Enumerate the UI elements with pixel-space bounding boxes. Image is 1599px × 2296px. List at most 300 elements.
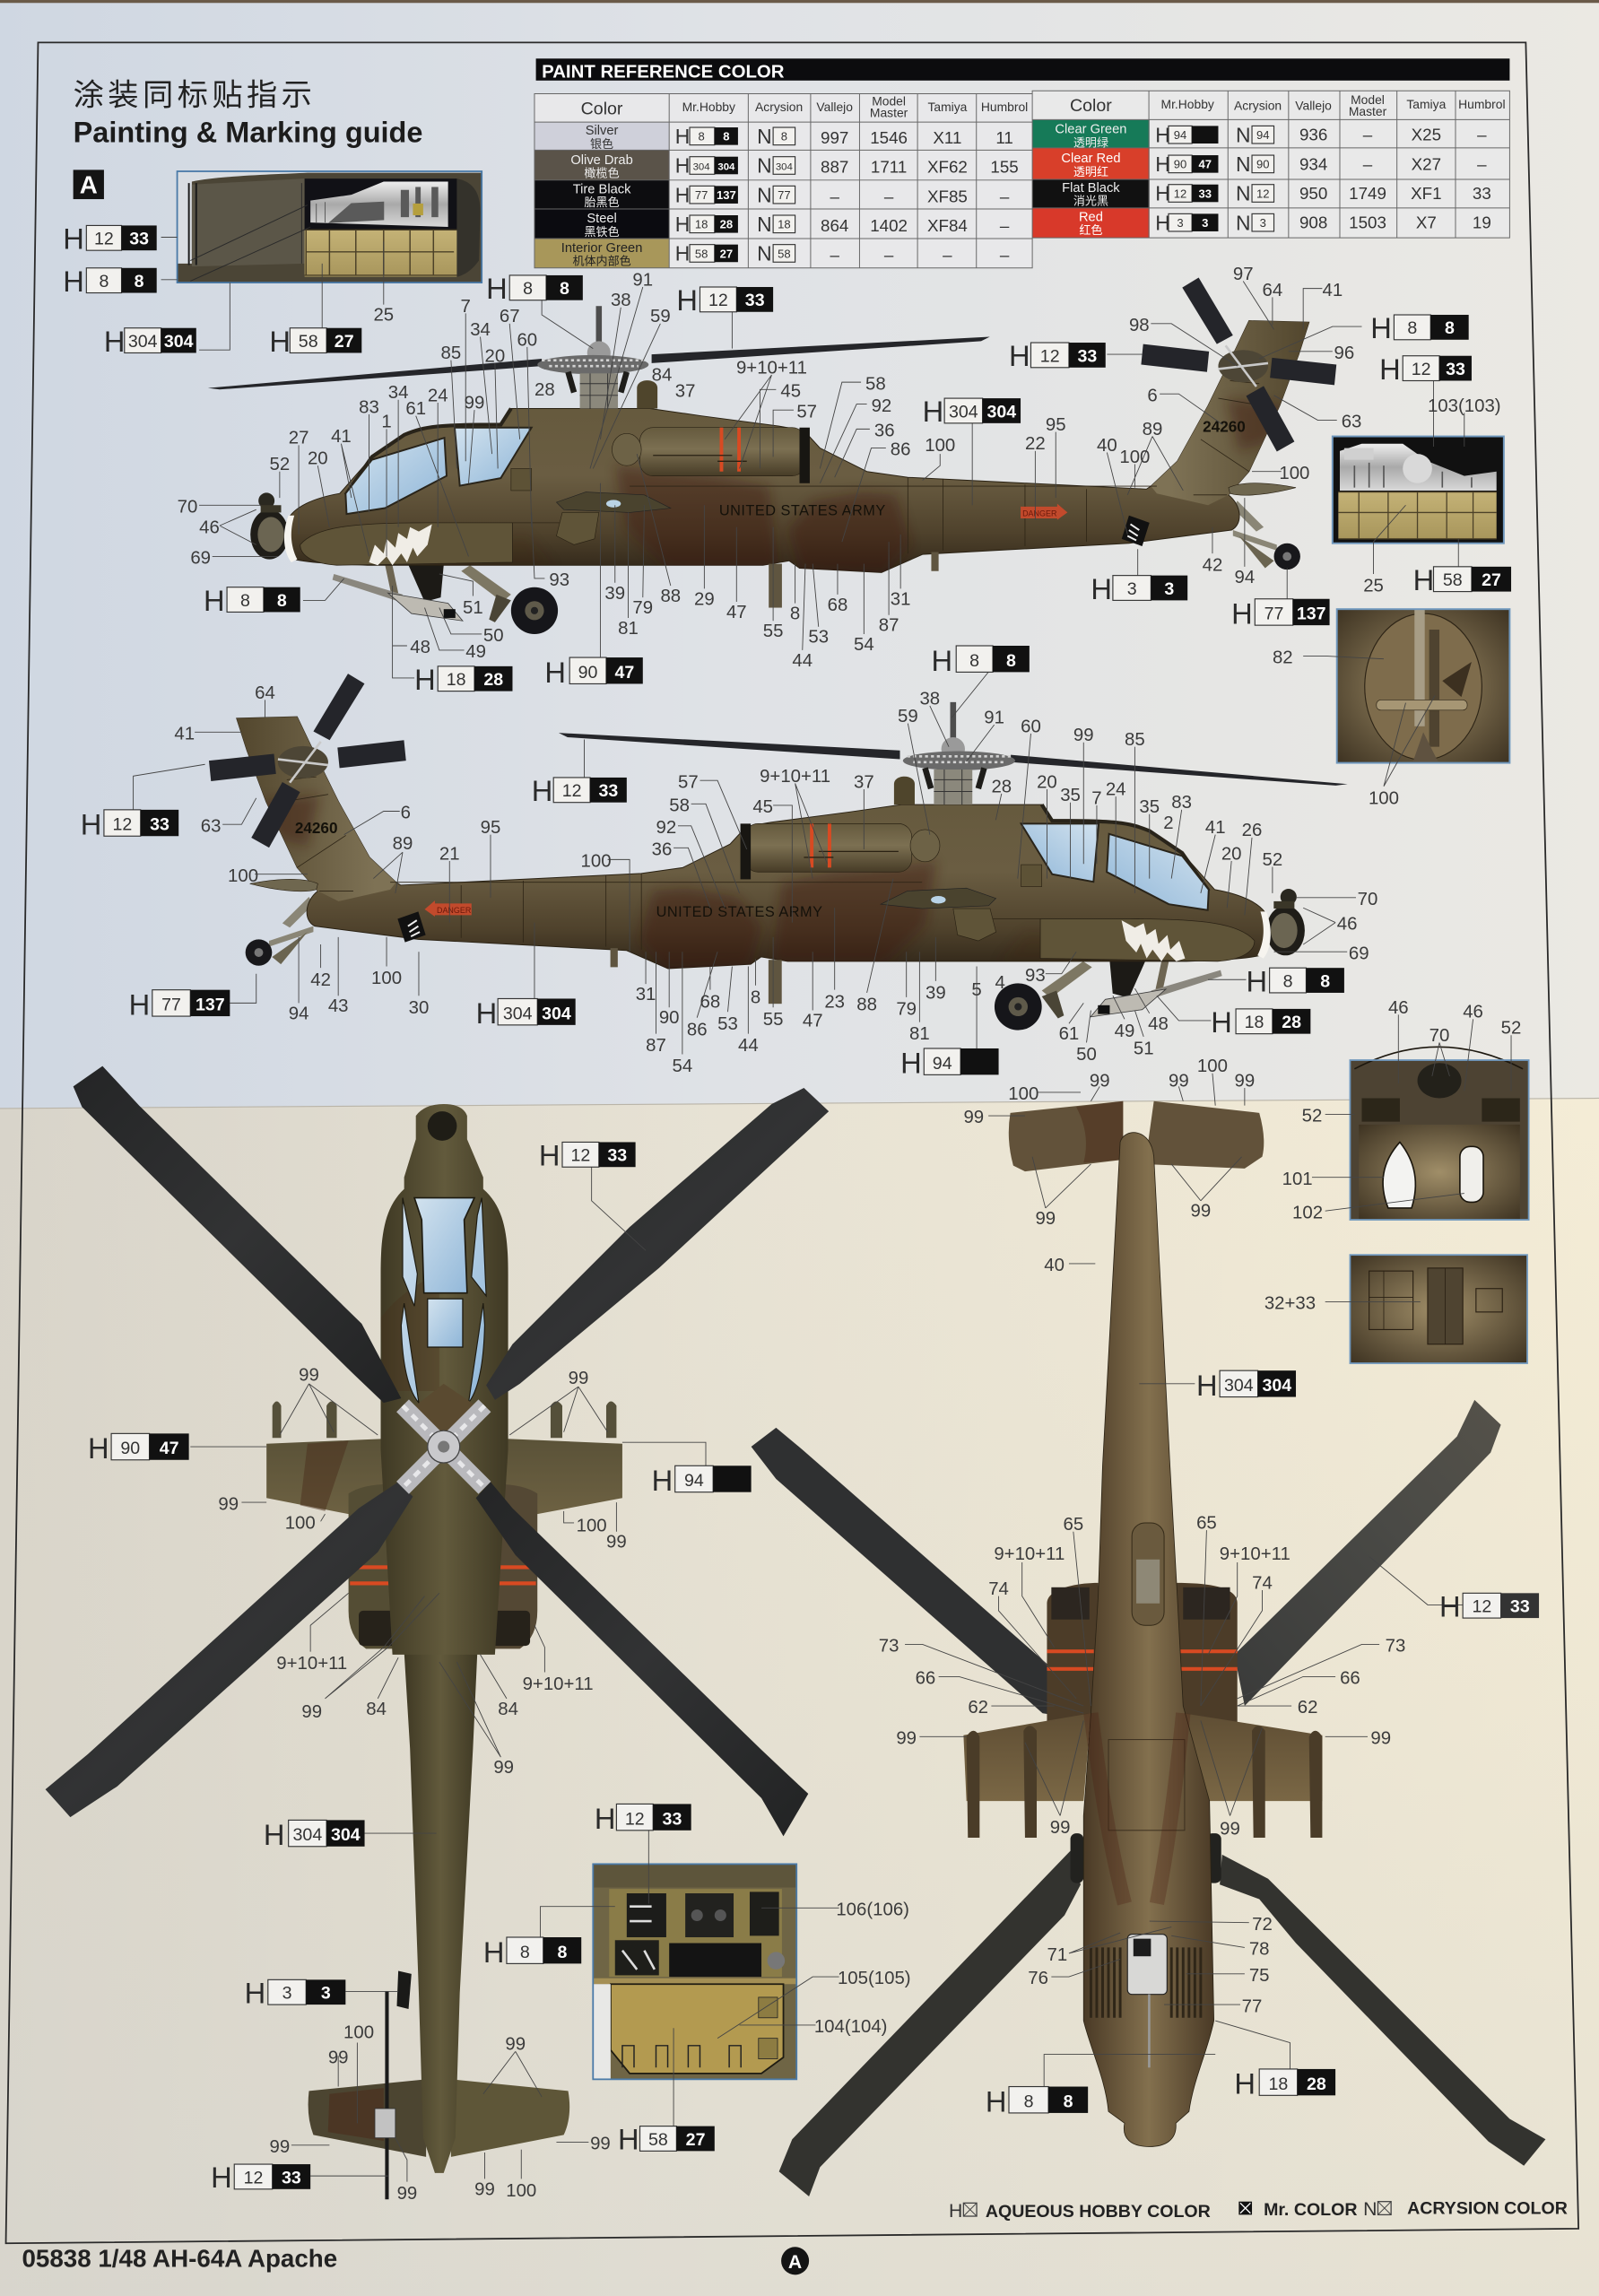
paint chip H 12/33: H [211,2161,232,2194]
paint chip H 8/8: 8 [240,591,250,611]
callouts: upper side view: 54 [854,635,874,655]
paint reference table: 18 [695,218,708,231]
paint chip H 18/28: 18 [447,670,466,690]
callouts: bottom view: 100 [1008,1084,1038,1104]
callouts: bottom view: 75 [1249,1966,1270,1986]
title: Painting & Marking guide [74,116,422,148]
paint chip H 12/33 [539,1139,636,1172]
callouts: upper side view: 57 [796,402,817,422]
callouts: lower side view: 63 [201,816,221,836]
paint reference table: 58 [778,247,791,260]
callouts: upper side view: 79 [632,598,653,618]
paint reference table: 8 [781,130,787,144]
paint reference table: Tamiya [1406,97,1447,111]
paint reference table: 消光黑 [1073,195,1108,208]
paint chip H 12/33: 12 [1040,346,1060,366]
callouts: upper side view: 20 [485,346,505,366]
callouts: bottom view: 74 [1252,1573,1273,1593]
paint reference table: Vallejo [816,100,853,114]
callouts: lower side view: 31 [636,985,656,1004]
paint chip H 58/27: 58 [299,332,318,352]
callouts: lower side view: 37 [854,772,874,792]
paint chip H 304/304: H [1196,1369,1218,1402]
callouts: top view: 100 [506,2181,536,2201]
rotor head [537,306,648,409]
callouts: lower side view: 69 [1349,944,1369,963]
callouts: upper side view: 103(103) [1428,396,1501,416]
paint reference table: Acrysion [755,100,803,114]
paint reference table: – [1000,216,1010,235]
callouts: lower side view: 42 [310,970,331,990]
paint reference table: N [1236,152,1251,176]
callouts: bottom view: 66 [1340,1669,1360,1689]
callouts: upper side view: 100 [1369,788,1399,808]
callouts: bottom view: 99 [963,1108,984,1127]
callouts: bottom view: 99 [896,1728,917,1748]
callouts: bottom view: 32+33 [1264,1294,1316,1314]
paint reference table: 透明绿 [1073,135,1108,149]
fuselage lettering, view 1: DANGER [1022,509,1057,518]
callouts: lower side view: 64 [255,683,275,703]
callouts: upper side view: 25 [1363,577,1384,596]
paint chip H 94 clear green [900,1047,999,1080]
callouts: bottom view: 73 [879,1637,899,1657]
forward fuselage and cockpit [381,1104,508,1655]
paint chip H 77/137: 137 [1297,604,1326,624]
main rotor blades [208,337,990,389]
callouts: lower side view: 35 [1139,797,1160,817]
paint reference table: N [1236,211,1251,234]
callouts: upper side view: 67 [500,307,520,326]
paint chip H 18/28: H [1211,1005,1232,1039]
paint reference table: 77 [695,188,708,202]
paint chip H 8/8: H [486,272,508,305]
callouts: top view: 99 [569,1369,588,1388]
callouts: lower side view: 85 [1125,730,1145,750]
paint reference table: 908 [1299,213,1327,232]
paint reference table: Humbrol [981,100,1028,114]
paint chip H 3/3: 3 [1127,579,1137,599]
callouts: top view: 99 [590,2135,611,2154]
colour brand legend: N [1363,2199,1377,2220]
callouts: upper side view: 98 [1129,316,1150,335]
callouts: upper side view: 82 [1273,648,1293,668]
callouts: cockpit interior: 106(106) [836,1900,909,1920]
callouts: lower side view: 92 [656,818,676,838]
callouts: bottom view: 65 [1196,1513,1217,1533]
paint reference table: X25 [1412,126,1441,144]
callouts: bottom view: 62 [968,1698,988,1718]
paint reference table: 950 [1299,184,1327,203]
paint reference table: 3 [1260,216,1266,230]
paint chip H 8/8: 8 [1024,2092,1034,2111]
fuselage lettering, view 2: 24260 [295,819,337,837]
callouts: lower side view: 26 [1242,821,1262,840]
callouts: lower side view: 46 [1337,915,1358,935]
callouts: lower side view: 20 [1221,844,1242,864]
callouts: upper side view: 84 [652,365,672,385]
paint chip H 12/33: H [539,1139,560,1172]
paint reference table: 94 [1256,128,1270,142]
paint reference table: – [1000,187,1010,205]
paint reference table: 橄榄色 [584,167,620,180]
callouts: bottom view: 99 [1235,1071,1255,1091]
paint reference table: 27 [720,247,733,260]
callouts: lower side view: 8 [751,987,760,1007]
paint reference table: N [757,154,772,178]
colour brand legend: AQUEOUS HOBBY COLOR [986,2202,1211,2222]
paint chip H 304/304: H [923,395,943,428]
callouts: upper side view: 63 [1342,413,1361,432]
fuselage lettering, view 1: 24260 [1203,418,1246,436]
callouts: lower side view: 60 [1021,717,1041,736]
paint reference table: 1503 [1349,213,1386,232]
paint reference table: 胎黑色 [584,196,620,209]
paint chip H 18/28 [1234,2067,1335,2100]
paint reference table [534,58,1509,268]
paint reference table: Acrysion [1234,98,1282,112]
paint reference table: 77 [778,188,791,202]
paint reference table: N [757,183,772,206]
paint reference table: XF1 [1411,184,1442,203]
inset: cockpit interior [593,1864,796,2079]
callouts: upper side view: 38 [611,291,631,310]
paint reference table: – [884,187,894,205]
paint chip H 3/3: 3 [1164,579,1174,599]
callouts: upper side view: 91 [632,270,653,290]
callouts: lower side view: 90 [659,1008,680,1028]
paint chip H 8/8 [483,1935,581,1969]
callouts: lower side view: 55 [763,1010,783,1030]
paint chip H 3/3 [1091,572,1187,605]
callouts: lower side view: 50 [1076,1045,1097,1065]
paint chip H 304/304 [1196,1369,1296,1402]
callouts: upper side view: 93 [549,570,569,590]
paint chip H 304/304: 304 [293,1825,322,1845]
paint chip H 12/33: 33 [745,291,765,310]
callouts: upper side view: 51 [463,598,483,618]
paint reference table: – [1363,154,1373,173]
paint reference table: N [1236,182,1251,205]
paint chip H 12/33 [1009,339,1106,372]
paint chip H 8/8: H [986,2084,1006,2118]
callouts: upper side view: 50 [483,626,504,646]
callouts: upper side view: 37 [675,381,695,401]
paint chip H 90/47: 90 [578,663,598,683]
callouts: upper side view: 88 [660,587,681,606]
paint reference table: 透明红 [1073,165,1108,178]
callouts: upper side view: 59 [650,307,671,326]
callouts: top view: 100 [285,1513,316,1533]
paint reference table: – [830,246,839,265]
paint reference table: – [1363,126,1373,144]
paint chip H 58/27: H [618,2123,639,2156]
paint reference table: 11 [995,128,1013,147]
paint chip H 12/33: 12 [571,1146,590,1166]
callouts: top view: 99 [299,1366,319,1386]
paint reference table: 18 [778,218,791,231]
callouts: lower side view: 41 [1205,818,1226,838]
paint chip H 12/33: H [1379,352,1401,386]
callouts: top view: 100 [577,1517,607,1536]
callouts: lower side view: 49 [1115,1022,1134,1041]
paint reference table: H [1155,211,1170,234]
paint reference table: H [675,242,690,265]
footer badge A [781,2247,809,2274]
callouts: lower side view: 58 [669,796,690,815]
callouts: bottom view: 76 [1028,1969,1048,1988]
paint reference table: H [675,183,690,206]
colour brand legend: H [949,2201,962,2222]
callouts: bottom view: 99 [1090,1071,1110,1091]
paint chip H 8/8: 8 [1320,971,1330,991]
tail rotor [1141,278,1336,452]
paint chip H 90/47: H [88,1431,109,1465]
callouts: lower side view [134,672,1377,1076]
callouts: upper side view: 85 [441,344,461,363]
callouts: upper side view: 9+10+11 [736,358,807,378]
paint reference table: Mr.Hobby [1161,97,1214,111]
helicopter bottom view [752,1101,1545,2196]
paint reference table: Model [872,94,906,109]
paint reference table: 33 [1473,184,1491,203]
paint chip H 8/8: 8 [1283,971,1293,991]
paint chip H 304/304: 304 [949,402,978,422]
callouts: lower side view: 52 [1263,850,1282,870]
paint reference table: N [1236,123,1251,146]
callouts: upper side view: 48 [410,638,430,657]
engine intake pod and stub wing [511,468,939,608]
paint chip H 58/27 [269,325,361,358]
callouts: bottom view: 65 [1063,1515,1083,1535]
callouts: top view: 9+10+11 [523,1674,594,1694]
rotor hub [403,1405,484,1488]
callouts: upper side view: 89 [1143,420,1162,439]
callouts: upper side view: 20 [308,449,328,469]
paint reference table: 94 [1174,128,1186,142]
callouts: lower side view: 43 [328,996,349,1016]
callouts: bottom view: 77 [1242,1996,1262,2016]
callouts: top view: 99 [397,2184,417,2204]
callouts: bottom view: 9+10+11 [994,1544,1065,1564]
callouts: top view: 9+10+11 [276,1654,347,1674]
callouts: lower side view: 4 [995,973,1005,993]
paint reference table: Mr.Hobby [682,100,735,114]
helicopter side view, nose left [208,278,1336,634]
paint reference table: 58 [695,247,708,260]
callouts: bottom view: 101 [1282,1170,1313,1189]
paint reference table: Interior Green [561,241,642,256]
underside details [1091,1523,1201,2067]
paint reference table: N [757,242,772,265]
paint reference table: 28 [720,218,733,231]
callouts: upper side view: 44 [792,651,813,671]
paint chip H 18/28: 28 [1282,1013,1301,1032]
callouts: upper side view: 42 [1203,556,1222,576]
paint chip H 18/28: 28 [1307,2074,1326,2094]
paint chip H 12/33: 33 [1077,346,1097,366]
callouts: cockpit interior: 104(104) [814,2017,887,2037]
callouts: top view: 99 [505,2035,526,2055]
paint chip H 58/27: 27 [686,2130,706,2150]
callouts: lower side view: 45 [752,797,773,817]
paint reference table: H [675,154,690,178]
paint chip H 94 clear green [652,1464,752,1497]
callouts: lower side view: 61 [1059,1024,1079,1044]
callouts: top view: 99 [270,2137,290,2157]
fuselage seams [410,380,1271,553]
paint chip H 12/33 [676,283,773,317]
callouts: bottom view: 71 [1047,1945,1067,1965]
callouts: upper side view: 99 [465,394,484,413]
paint chip H 8/8: 8 [1407,318,1417,338]
callouts: lower side view: 89 [393,834,413,854]
paint reference table: 864 [821,216,848,235]
paint chip H 8/8: 8 [560,279,569,299]
callouts: bottom view: 99 [1191,1202,1211,1222]
callouts: lower side view: 91 [984,709,1004,728]
callouts: bottom view: 102 [1292,1203,1323,1222]
paint reference table: 12 [1256,187,1270,200]
paint reference table: Steel [587,212,617,226]
paint reference table: Color [1070,96,1112,116]
paint chip H 12/33: H [676,283,698,317]
landing gear and nose gun [333,500,1300,634]
paint chip H 12/33 [63,222,157,256]
callouts: lower side view: 41 [174,724,195,744]
paint chip H 8/8: 8 [135,272,144,291]
callouts: bottom view: 73 [1386,1637,1405,1657]
callouts: upper side view: 1 [381,413,392,432]
callouts: lower side view: 7 [1091,788,1102,808]
paint chip H 12/33: 12 [1472,1597,1491,1617]
callouts: bottom view: 99 [1050,1818,1070,1838]
paint reference table: 47 [1199,158,1212,171]
paint reference table: 90 [1256,158,1270,171]
paint chip H 58/27: 27 [335,332,354,352]
paint reference table: X11 [933,128,961,147]
callouts: bottom view: 74 [988,1579,1009,1599]
fuselage lettering, view 2: DANGER [437,906,472,915]
paint chip H 12/33: 12 [244,2168,263,2187]
fuselage body [285,321,1309,572]
callouts: upper side view: 94 [1235,568,1255,587]
fuselage lettering, view 2 [295,819,822,920]
callouts: lower side view: 36 [652,839,672,859]
callouts: top view: 100 [343,2023,374,2043]
paint reference table: XF85 [927,187,968,205]
paint reference table: 3 [1177,216,1184,230]
paint chip H 3/3: 3 [321,1984,331,2004]
callouts: upper side view: 92 [872,396,891,416]
callouts: bottom view: 99 [1035,1209,1056,1229]
callouts: upper side view: 68 [828,596,847,615]
callouts: upper side view: 8 [790,604,800,624]
paint reference table: H [1155,152,1170,176]
paint chip H 18/28: H [1234,2067,1256,2100]
paint reference table: – [943,246,952,265]
paint chip H 12/33 [595,1802,691,1835]
paint reference table: – [884,246,894,265]
callouts: lower side view: 86 [687,1020,708,1039]
callouts: top view: 99 [493,1758,514,1778]
paint reference table: – [830,187,839,205]
paint chip H 90/47: 47 [160,1439,179,1458]
paint chip H 8/8: 8 [1006,651,1016,671]
callouts: upper side view: 64 [1263,281,1282,300]
callouts: upper side view: 39 [604,584,625,604]
callouts: bottom view: 78 [1249,1940,1270,1960]
callouts: bottom view [879,998,1521,2087]
paint chip H 12/33 [1379,352,1472,386]
paint chip H 18/28 [1211,1005,1310,1039]
paint chip H 8/8 [204,584,300,617]
paint chip H 12/33: 33 [1446,360,1465,379]
paint chip H 8/8 [63,265,157,298]
paint reference table: 8 [698,130,705,144]
callouts: lower side view: 24 [1106,780,1126,800]
paint chip H 8/8: 8 [523,279,533,299]
callouts: lower side view: 81 [909,1024,930,1044]
callouts: lower side view: 100 [371,969,402,988]
callouts: bottom view: 40 [1044,1256,1065,1275]
callouts: upper side view: 70 [178,497,197,517]
paint chip H 3/3 [245,1976,345,2009]
paint reference table: 137 [717,188,736,202]
paint chip H 8/8: H [931,644,952,677]
paint chip H 3/3: H [1091,572,1112,605]
paint chip H 304/304: 304 [986,402,1016,422]
callouts: upper side view: 55 [763,622,783,641]
callouts: bottom view: 70 [1430,1026,1449,1046]
camouflage patches [439,398,1284,574]
callouts: bottom view: 9+10+11 [1220,1544,1290,1564]
callouts: upper side view: 34 [470,320,491,340]
paint reference table: Silver [586,124,619,138]
paint chip H 12/33: 12 [94,230,114,249]
paint chip H 12/33: 33 [607,1146,627,1166]
engine nacelle [613,380,810,483]
paint reference table: Olive Drab [570,153,633,168]
paint reference table: 银色 [590,137,613,151]
paint reference table: 1546 [870,128,908,147]
callouts: lower side view: 20 [1037,772,1057,792]
fuselage lettering, view 1: UNITED STATES ARMY [719,503,886,519]
paint chip H 304/304: H [476,996,497,1030]
paint chip H 12/33: 33 [150,815,169,835]
paint reference table: 304 [693,161,710,172]
paint chip H 18/28 [414,663,512,696]
callouts: upper side view: 58 [865,374,886,394]
paint chip H 3/3: 3 [282,1984,292,2004]
callouts: upper side view: 53 [808,628,829,648]
callouts: lower side view: 28 [991,777,1012,796]
paint reference table: H [675,125,690,148]
paint chip H 12/33 [81,808,178,841]
paint reference table: PAINT REFERENCE COLOR [542,63,785,83]
callouts: lower side view: 9+10+11 [760,767,830,787]
stabilator [1229,483,1296,495]
callouts: upper side view: 46 [199,517,220,537]
callouts: upper side view: 60 [517,330,537,350]
callouts: lower side view: 39 [926,983,946,1003]
paint chip H 77/137: H [1231,597,1253,631]
callouts: upper side view: 41 [331,427,352,447]
paint chip H 12/33 [532,774,627,807]
callouts: lower side view: 48 [1148,1014,1169,1034]
callouts: lower side view: 100 [581,852,612,872]
paint chip H 304/304: 304 [164,332,194,352]
